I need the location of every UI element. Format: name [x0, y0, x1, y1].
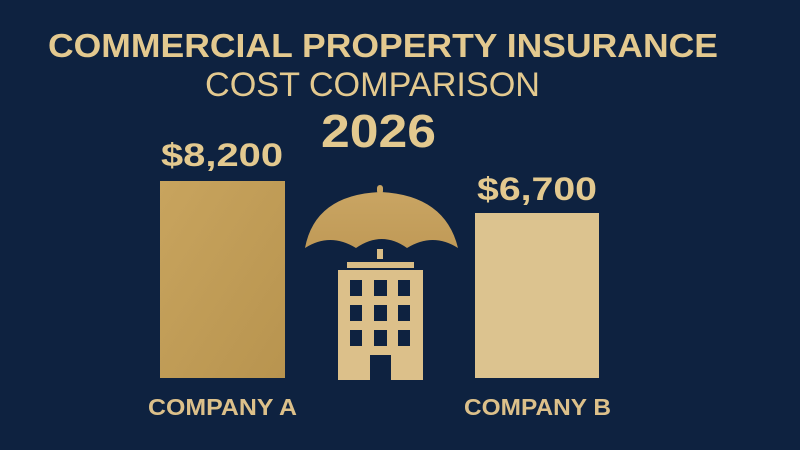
- year: 2026: [321, 105, 436, 157]
- bar: company B: [464, 171, 611, 420]
- subtitle: COST COMPARISON: [205, 66, 540, 104]
- title: [48, 27, 718, 104]
- icon: umbrella over building: [305, 185, 458, 380]
- title: COMMERCIAL PROPERTY INSURANCE: [48, 27, 718, 64]
- bar: company A: [148, 137, 297, 420]
- label A: COMPANY A: [148, 394, 297, 420]
- value A: $8,200: [161, 137, 283, 173]
- value B: $6,700: [477, 171, 597, 207]
- label B: COMPANY B: [464, 394, 611, 420]
